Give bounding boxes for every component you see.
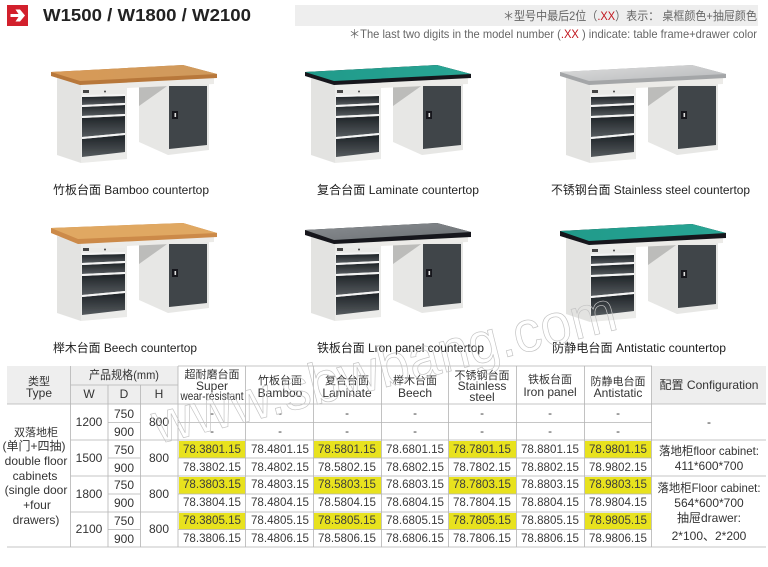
model numbers: 78.7803.15	[453, 478, 511, 491]
title: W1500 / W1800 / W2100	[43, 5, 251, 25]
empty rows: -	[616, 407, 620, 420]
panel: antistatic bench	[552, 224, 726, 355]
type description	[2, 426, 67, 527]
size values: 1200	[76, 415, 103, 429]
configuration details: 411*600*700	[675, 459, 744, 473]
iron countertop	[305, 223, 471, 244]
beech countertop	[51, 223, 217, 244]
icon: red arrow	[7, 5, 28, 26]
model numbers: 78.6801.15	[386, 443, 444, 456]
model numbers: 78.9806.15	[589, 532, 647, 545]
type description: cabinets	[13, 469, 57, 483]
header: type: 类型	[28, 374, 50, 388]
caption: stainless: 不锈钢台面 Stainless steel countertop	[551, 182, 750, 197]
empty rows: -	[480, 425, 484, 438]
table header shading	[7, 366, 766, 404]
header: antistatic: 防静电台面	[590, 374, 646, 388]
header: iron panel: 铁板台面	[528, 372, 572, 386]
size values: 800	[149, 522, 169, 536]
size values: 800	[149, 487, 169, 501]
antistatic countertop	[560, 224, 726, 245]
header: iron panel: Iron panel	[523, 385, 577, 399]
caption: iron: 铁板台面 Lron panel countertop	[317, 340, 484, 355]
header: laminate: Laminate	[322, 386, 372, 400]
header: bamboo: 竹板台面	[258, 373, 302, 387]
model numbers: 78.7802.15	[453, 461, 511, 474]
header: stainless: steel	[469, 390, 495, 404]
model numbers: 78.9802.15	[589, 461, 647, 474]
model numbers: 78.3801.15	[183, 443, 241, 456]
model numbers: 78.3806.15	[183, 532, 241, 545]
size values: 800	[149, 451, 169, 465]
size values: 900	[114, 496, 134, 510]
model numbers: 78.4804.15	[251, 496, 309, 509]
header: size: 产品规格(mm)	[89, 367, 159, 382]
size values: 900	[114, 532, 134, 546]
header: super wear-resistant: 超耐磨台面	[184, 367, 240, 381]
header: stainless: 不锈钢台面	[454, 368, 510, 382]
model numbers: 78.5806.15	[318, 532, 376, 545]
header: size: D	[120, 387, 129, 401]
model numbers: 78.8801.15	[521, 443, 579, 456]
model numbers: 78.3802.15	[183, 461, 241, 474]
empty rows: -	[480, 407, 484, 420]
configuration details: 564*600*700	[674, 496, 744, 510]
model numbers: 78.8805.15	[521, 514, 579, 527]
header: laminate	[322, 373, 372, 400]
header: super wear-resistant: wear-resistant	[180, 389, 244, 403]
model numbers: 78.9805.15	[589, 514, 647, 527]
size values: 2100	[76, 522, 103, 536]
header: beech: Beech	[398, 386, 432, 400]
model numbers: 78.6805.15	[386, 514, 444, 527]
model numbers: 78.5804.15	[318, 496, 376, 509]
header: size: H	[155, 387, 163, 401]
model numbers: 78.8802.15	[521, 461, 579, 474]
empty rows: -	[278, 407, 282, 420]
model numbers: 78.4803.15	[251, 478, 309, 491]
size values: 1800	[76, 487, 103, 501]
header: stainless	[454, 368, 510, 404]
configuration details: 抽屉drawer:	[677, 511, 741, 525]
header: bamboo: Bamboo	[258, 386, 303, 400]
header: antistatic: Antistatic	[594, 386, 642, 400]
model numbers	[183, 443, 647, 545]
configuration details: 落地柜Floor cabinet:	[658, 481, 760, 495]
bamboo countertop	[51, 65, 217, 85]
caption: beech: 榉木台面 Beech countertop	[53, 340, 197, 355]
model numbers: 78.3805.15	[183, 514, 241, 527]
laminate countertop	[305, 65, 471, 85]
type description: (单门+四抽)	[2, 438, 66, 453]
header: laminate: 复合台面	[325, 373, 369, 387]
size values: 900	[114, 425, 134, 439]
model numbers: 78.7806.15	[453, 532, 511, 545]
type description: 双落地柜	[14, 426, 58, 439]
header: bamboo	[258, 373, 303, 400]
header: beech	[393, 373, 437, 400]
stainless countertop	[560, 65, 726, 85]
model numbers: 78.4801.15	[251, 443, 309, 456]
model numbers: 78.6804.15	[386, 496, 444, 509]
empty rows: -	[548, 425, 552, 438]
header: type	[26, 374, 52, 400]
configuration details: 落地柜floor cabinet:	[659, 444, 759, 458]
highlighted model cells	[179, 441, 651, 530]
header: stainless: Stainless	[458, 379, 506, 393]
size values: 900	[114, 461, 134, 475]
model numbers: 78.7801.15	[453, 443, 511, 456]
panel: laminate bench	[305, 65, 479, 197]
model numbers: 78.4806.15	[251, 532, 309, 545]
header: size: W	[83, 387, 95, 401]
model numbers: 78.9801.15	[589, 443, 647, 456]
empty rows: -	[278, 425, 282, 438]
caption: bamboo: 竹板台面 Bamboo countertop	[53, 182, 209, 197]
model numbers: 78.5801.15	[318, 443, 376, 456]
size values: 750	[114, 443, 134, 457]
size values: 750	[114, 478, 134, 492]
model numbers: 78.6803.15	[386, 478, 444, 491]
empty rows: -	[548, 407, 552, 420]
model numbers: 78.8806.15	[521, 532, 579, 545]
watermark: www.sbwbang.com	[144, 278, 623, 457]
model numbers: 78.5802.15	[318, 461, 376, 474]
empty rows: -	[413, 407, 417, 420]
panel: stainless bench	[551, 65, 750, 197]
configuration details: -	[707, 415, 711, 429]
caption: antistatic: 防静电台面 Antistatic countertop	[552, 340, 726, 355]
model numbers: 78.6806.15	[386, 532, 444, 545]
header: antistatic	[590, 374, 646, 400]
size values	[76, 407, 169, 546]
empty rows: -	[345, 407, 349, 420]
model number note	[295, 5, 758, 41]
empty rows: -	[210, 407, 214, 420]
size values: 800	[149, 415, 169, 429]
model numbers: 78.5803.15	[318, 478, 376, 491]
model numbers: 78.3804.15	[183, 496, 241, 509]
panel: beech bench	[51, 223, 217, 355]
type description: +four	[23, 498, 51, 512]
type description: (single door	[5, 483, 67, 497]
configuration details	[658, 415, 760, 543]
size values: 750	[114, 514, 134, 528]
header: super wear-resistant	[180, 367, 244, 403]
model number note: ＊型号中最后2位（.XX）表示： 桌框颜色+抽屉颜色	[503, 8, 757, 23]
header: configuration: 配置 Configuration	[660, 378, 758, 392]
model numbers: 78.4805.15	[251, 514, 309, 527]
model numbers: 78.3803.15	[183, 478, 241, 491]
type description: double floor	[5, 454, 67, 468]
empty rows: -	[345, 425, 349, 438]
header: type: Type	[26, 386, 52, 400]
panel: bamboo bench	[51, 65, 217, 197]
empty rows: -	[413, 425, 417, 438]
configuration details: 2*100、2*200	[672, 529, 747, 543]
panel: iron bench	[305, 223, 484, 355]
model numbers: 78.5805.15	[318, 514, 376, 527]
header: beech: 榉木台面	[393, 373, 437, 387]
model numbers: 78.4802.15	[251, 461, 309, 474]
size values: 1500	[76, 451, 103, 465]
header: iron panel	[523, 372, 577, 399]
caption: laminate: 复合台面 Laminate countertop	[317, 182, 479, 197]
model numbers: 78.8803.15	[521, 478, 579, 491]
model numbers: 78.9803.15	[589, 478, 647, 491]
table	[2, 366, 766, 547]
empty rows: -	[210, 425, 214, 438]
type description: drawers)	[13, 513, 59, 527]
model numbers: 78.7805.15	[453, 514, 511, 527]
model numbers: 78.9804.15	[589, 496, 647, 509]
header: super wear-resistant: Super	[196, 379, 228, 393]
size values: 750	[114, 407, 134, 421]
header: size	[83, 367, 163, 401]
model numbers: 78.7804.15	[453, 496, 511, 509]
model numbers: 78.6802.15	[386, 461, 444, 474]
model number note: ＊The last two digits in the model number (.XX ) indicate: table frame+drawer color	[349, 27, 757, 41]
empty rows: -	[616, 425, 620, 438]
model numbers: 78.8804.15	[521, 496, 579, 509]
empty rows	[210, 407, 620, 438]
